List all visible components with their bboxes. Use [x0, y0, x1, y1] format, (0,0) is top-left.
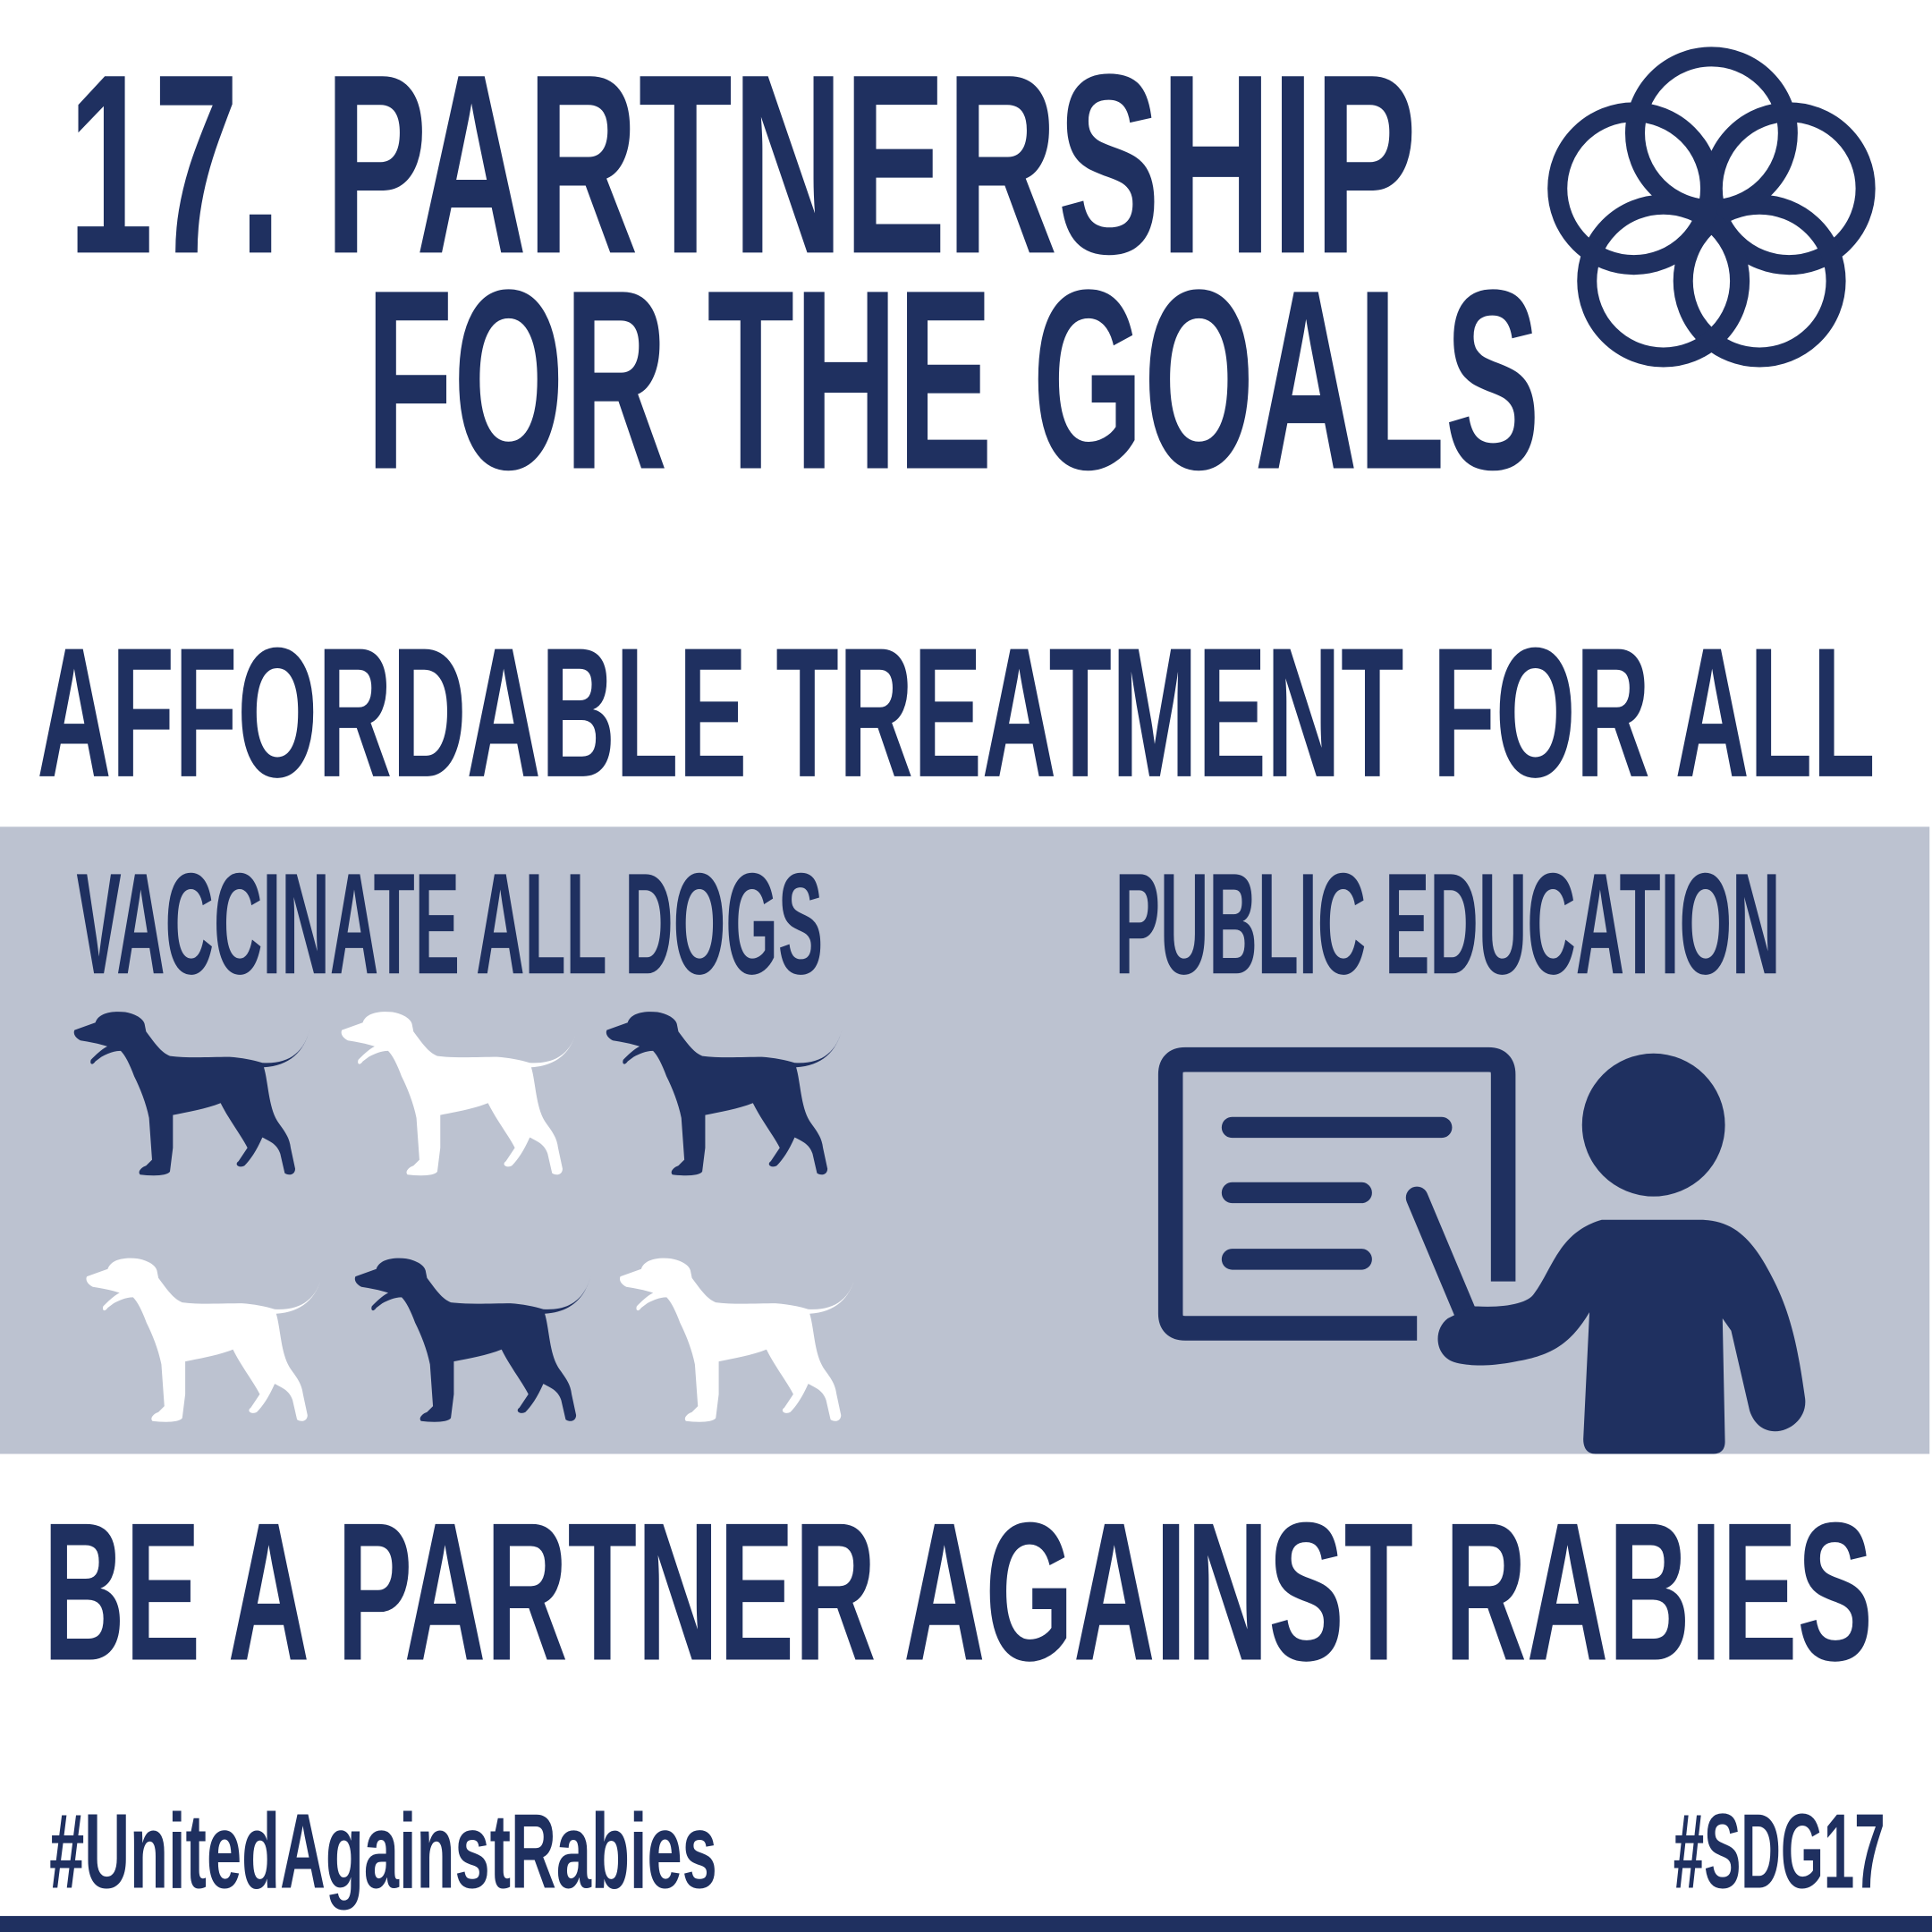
dogs grid: [74, 1012, 856, 1422]
hashtag left: #UnitedAgainstRabies: [49, 1792, 717, 1911]
bottom bar: [0, 1916, 1932, 1932]
panel: grey band: VACCINATE ALL DOGS: [76, 843, 823, 1004]
icon: SDG17 rings logo: [1557, 56, 1866, 357]
panel: grey band: [0, 826, 1929, 1454]
icon: teacher at board: [1171, 1054, 1805, 1454]
